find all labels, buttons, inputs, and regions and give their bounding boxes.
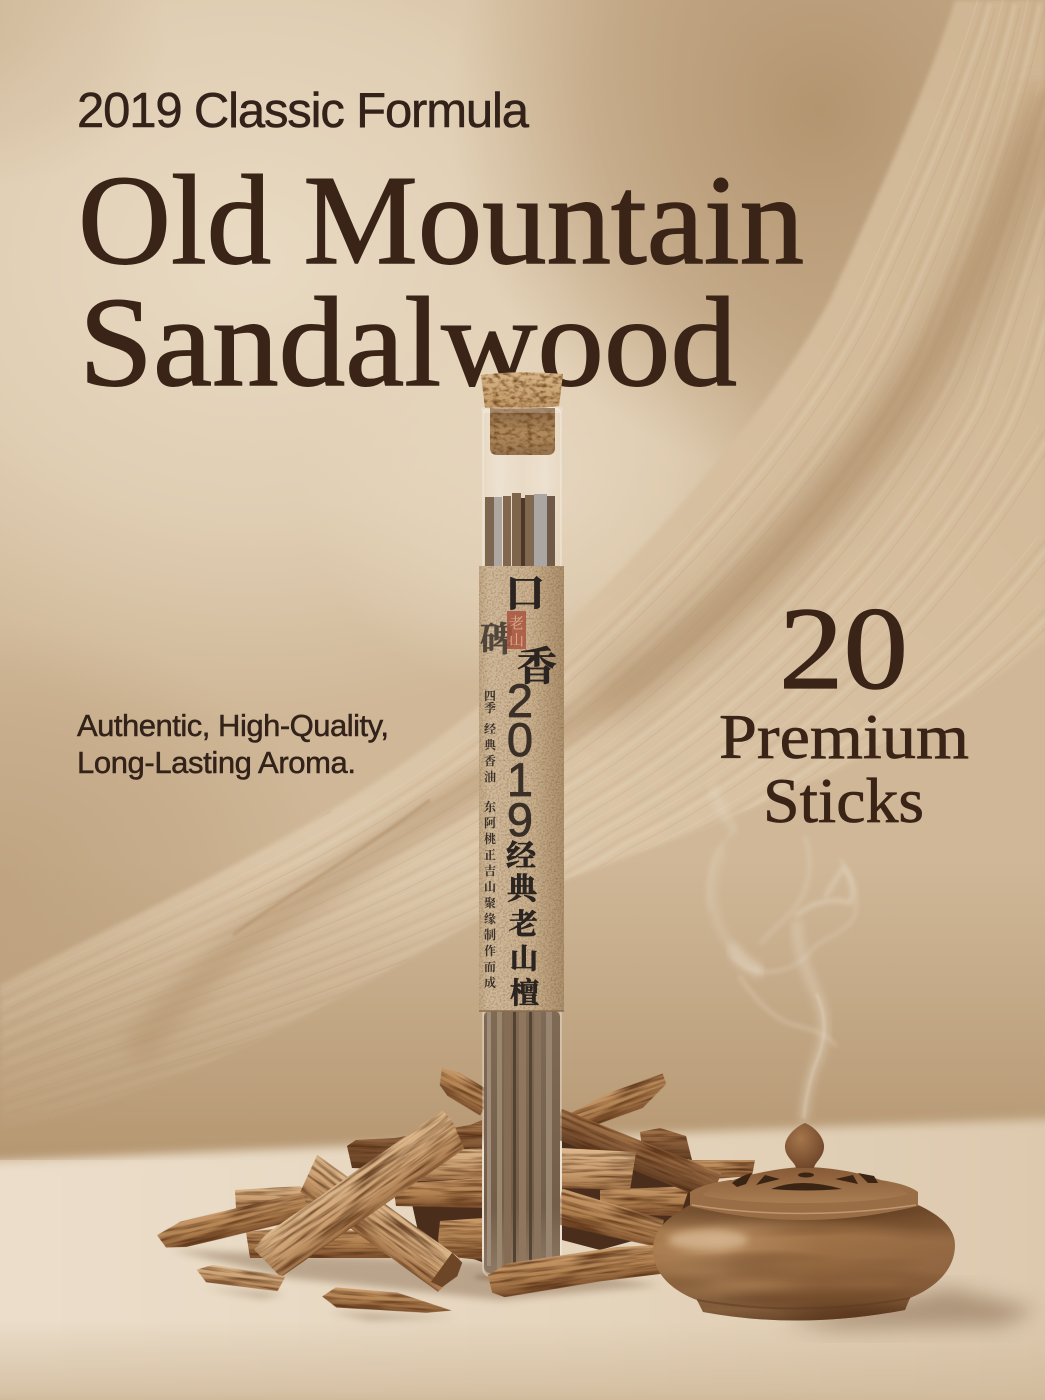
year digits: 2 (507, 674, 533, 727)
lid cutouts (732, 1172, 878, 1190)
incense smoke (708, 788, 856, 1117)
fine print column: 缘 (484, 911, 496, 926)
left stick (155, 1192, 309, 1253)
floor (0, 1118, 1045, 1400)
dark pile core (400, 1130, 700, 1262)
product name: 老 (509, 908, 538, 941)
year digits: 9 (507, 793, 533, 846)
fine print column: 聚 (484, 895, 496, 910)
fine print column: 季 (484, 700, 496, 715)
fine print column: 而 (484, 960, 496, 974)
fine print column: 香 (484, 753, 496, 768)
fine print column: 山 (484, 879, 496, 894)
title (78, 149, 804, 413)
foot line (697, 1298, 910, 1309)
wood chip pile (155, 1064, 755, 1320)
rim highlight (692, 1205, 916, 1214)
brand characters: 口 (505, 572, 545, 616)
tube rim (481, 407, 563, 413)
fine print column: 正 (484, 847, 496, 862)
product name: 经 (506, 840, 537, 873)
fine print column: 制 (484, 927, 496, 942)
small chip left (195, 1263, 286, 1293)
lid knob (785, 1123, 824, 1168)
fine print column: 典 (484, 737, 498, 752)
fine print column (484, 689, 498, 990)
stick count callout (719, 583, 969, 836)
cork plug (490, 408, 555, 455)
fine print column: 阿 (484, 815, 496, 830)
tagline: Authentic, High-Quality, (77, 708, 389, 743)
burner shadow (780, 1288, 1040, 1330)
glass interior (483, 408, 561, 1276)
title: Old Mountain (78, 149, 804, 291)
stick count callout: Sticks (763, 765, 924, 836)
fine print column: 油 (484, 769, 496, 784)
product name: 山 (510, 943, 538, 974)
product name: 檀 (510, 977, 539, 1010)
burner body (653, 1205, 955, 1321)
title: Sandalwood (79, 271, 737, 413)
cork top (481, 372, 563, 409)
fine print column: 成 (484, 975, 496, 990)
fine print column: 桃 (484, 831, 497, 846)
back sticks (235, 1064, 755, 1260)
leaning stick (294, 1155, 467, 1295)
incense tube (474, 372, 566, 1282)
fine print column: 经 (484, 721, 497, 736)
fine print column: 吉 (484, 863, 496, 878)
paper label band: 碑 (480, 621, 514, 659)
front stick (251, 1109, 469, 1281)
incense sticks in tube (484, 493, 560, 1273)
stick count callout: 20 (779, 583, 908, 714)
burner rim (690, 1180, 918, 1220)
tagline: Long-Lasting Aroma. (77, 745, 356, 780)
fine print column: 四 (484, 689, 496, 703)
fine print column: 东 (484, 799, 497, 814)
product name: 典 (507, 873, 541, 906)
red seal: 山 (509, 632, 524, 649)
year digits: 0 (507, 713, 533, 766)
tagline (77, 708, 389, 780)
product name (506, 840, 541, 1010)
paper label band (479, 566, 564, 1011)
body highlight (668, 1230, 748, 1250)
fine print column: 作 (484, 943, 496, 958)
chip shadows (170, 1250, 660, 1320)
subtitle: 2019 Classic Formula: 2019 Classic Formula (77, 84, 530, 138)
small chip front (321, 1286, 453, 1316)
paper label band: 香 (517, 645, 557, 689)
front stick over tube (486, 1241, 668, 1299)
red seal: 老 (509, 614, 524, 632)
red seal (507, 611, 526, 649)
incense burner (653, 1123, 1040, 1330)
year digits (507, 674, 533, 846)
year digits: 1 (507, 753, 533, 806)
burner lid (702, 1167, 908, 1203)
stick count callout: Premium (719, 701, 969, 772)
tube shadow (474, 1272, 566, 1282)
glass outline (483, 408, 561, 1276)
lower wall shadow (0, 860, 1045, 1160)
